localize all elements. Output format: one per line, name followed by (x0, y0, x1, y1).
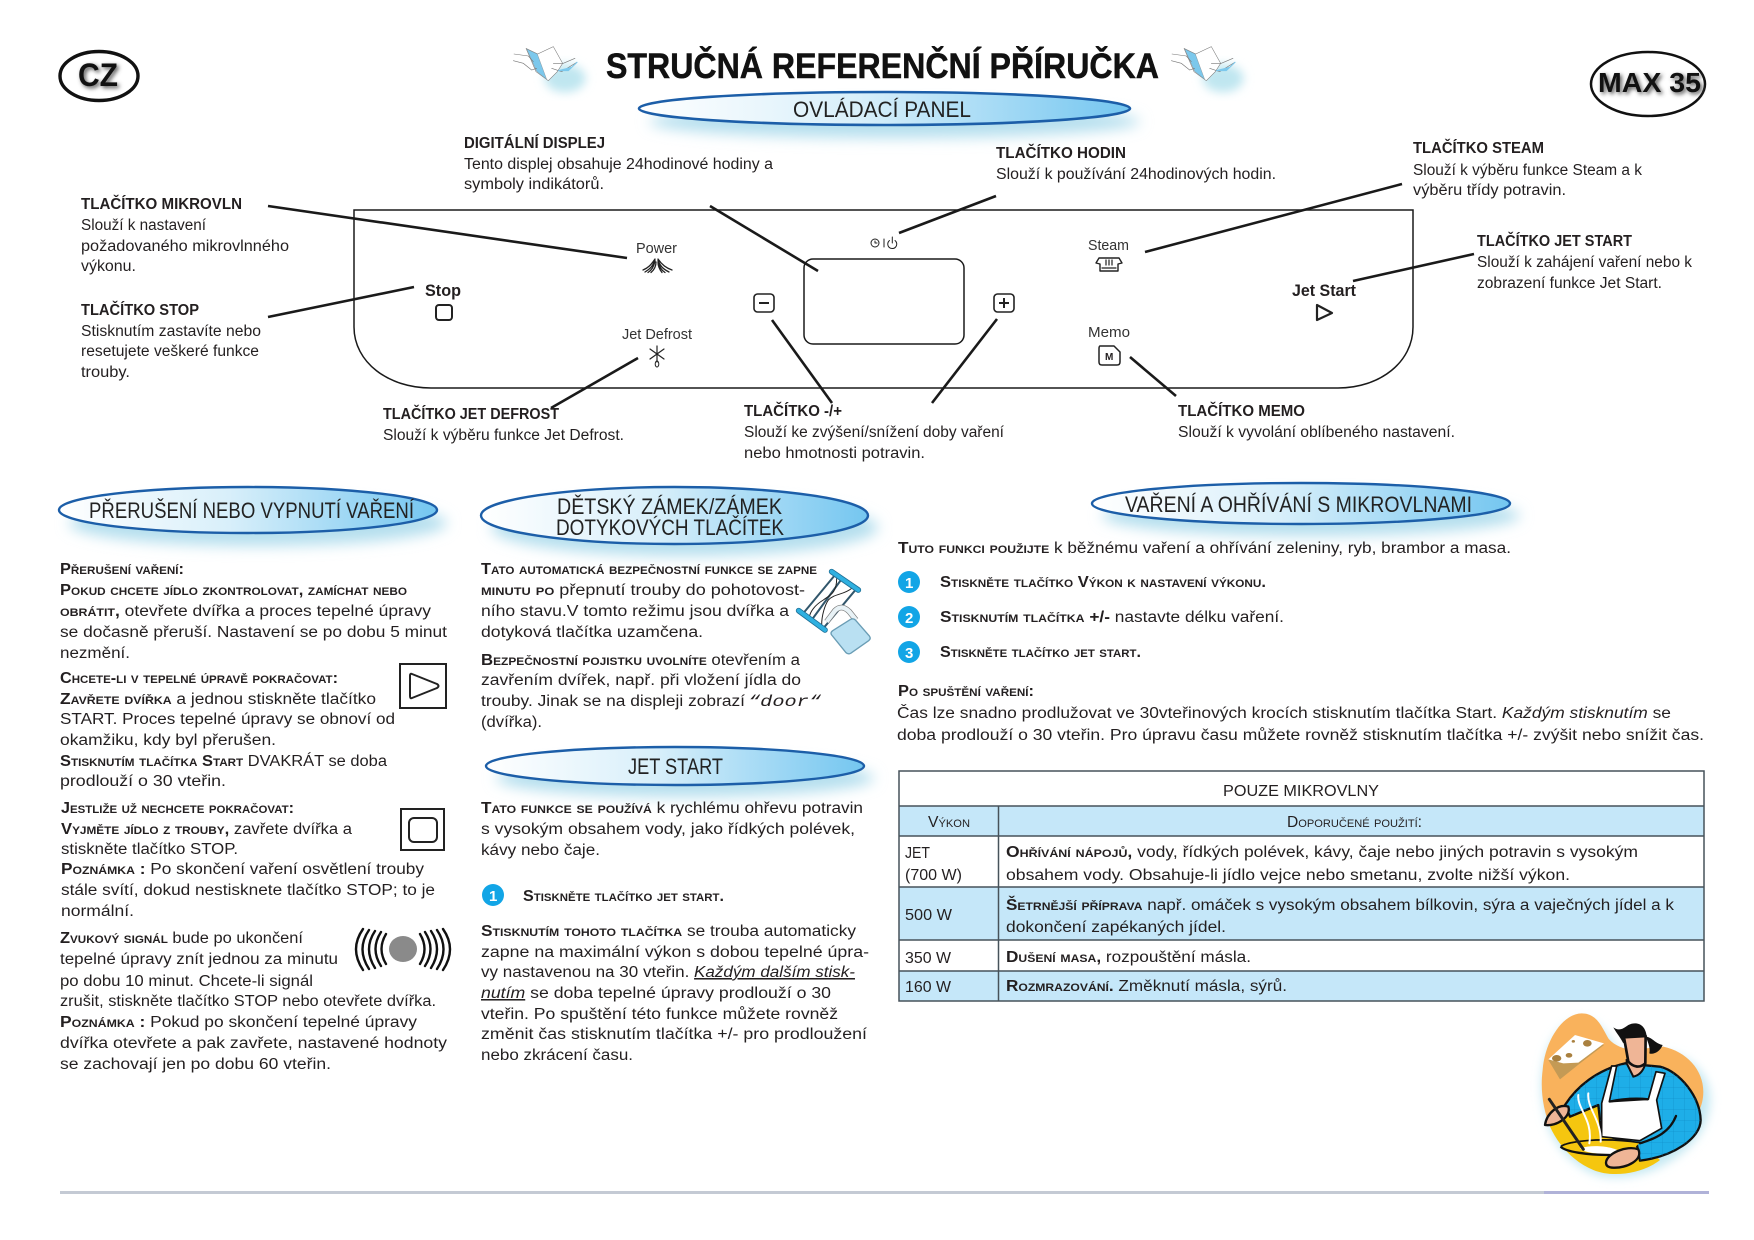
text: interrupt cooking: obrátit, otevřete dvířka a proces tepelné úpravy (60, 603, 431, 620)
label: memo button (1178, 402, 1455, 441)
heading oval: JET START (628, 754, 723, 779)
text: jet start details: vteřin. Po spuštění této funkce můžete rovněž (481, 1006, 838, 1023)
text: jet start details: změnit čas stisknutím tlačítka +/- pro prodloužení (481, 1026, 868, 1043)
row: 350 W: Dušení masa, rozpouštění másla. (1006, 949, 1251, 966)
label: steam button: Slouží k výběru funkce Steam a k (1413, 162, 1642, 179)
text: sound signal: tepelné úpravy znít jednou za minutu (60, 951, 338, 968)
label: jet start button: Slouží k zahájení vaření nebo k (1477, 254, 1692, 271)
plus button (994, 294, 1014, 312)
text: sound signal: Poznámka : Pokud po skončení tepelné úpravy (60, 1014, 417, 1031)
text: interrupt cooking: nezmění. (60, 645, 130, 662)
step 3 (898, 641, 1141, 663)
label: digital display: symboly indikátorů. (464, 176, 604, 193)
row: 160 W: Rozmrazování. Změknutí másla, sýrů. (1006, 978, 1287, 995)
minus button (754, 294, 774, 312)
text: automatic safety function: Tato automatická bezpečnostní funkce se zapne (481, 561, 817, 578)
badge: CZ (60, 52, 138, 100)
heading oval: VAŘENÍ A OHŘÍVÁNÍ S MIKROVLNAMI (1125, 492, 1472, 517)
icon: stop button (401, 809, 444, 850)
heading oval: DĚTSKÝ ZÁMEK/ZÁMEK (557, 494, 782, 519)
title: STRUČNÁ REFERENČNÍ PŘÍRUČKA (606, 46, 1159, 86)
row: jet: JET (905, 845, 930, 862)
digital display (804, 259, 964, 344)
label: clock button: TLAČÍTKO HODIN (996, 144, 1126, 162)
text: do not continue: stiskněte tlačítko STOP. (61, 841, 238, 858)
step 1: 1 (905, 575, 913, 592)
text: jet start details: zapne na maximální výkon s dobou tepelné úpra- (481, 944, 869, 961)
text: unlocking: zavřením dvířek, např. při vložení jídla do (481, 672, 801, 689)
step 2: 2 (905, 610, 913, 627)
text: to continue: Chcete-li v tepelné úpravě pokračovat: (60, 670, 338, 687)
step 1 (482, 884, 724, 906)
label: minus plus button (744, 402, 1005, 462)
text: jet start details: vy nastavenou na 30 vteřin. Každým dalším stisk- (481, 964, 855, 981)
text: unlocking: “door“ (748, 693, 822, 711)
panel: child lock (481, 487, 878, 731)
power control (636, 240, 677, 272)
step 3: 3 (905, 645, 913, 662)
text: unlocking: trouby. Jinak se na displeji zobrazí (481, 693, 746, 710)
label: minus plus button: TLAČÍTKO -/+ (744, 402, 842, 420)
text: unlocking: (dvířka). (481, 714, 542, 731)
text: jet start purpose: Tato funkce se používá k rychlému ohřevu potravin (481, 800, 863, 817)
text: interrupt cooking (60, 561, 448, 662)
text: intro: Tuto funkci použijte k běžnému vaření a ohřívání zeleniny, ryb, brambor a masa. (898, 540, 1511, 557)
icon: sound (356, 929, 450, 970)
jet start control: Jet Start (1292, 281, 1356, 300)
badge: MAX 35: MAX 35 (1598, 67, 1701, 98)
label: stop button (81, 301, 261, 381)
row: jet: obsahem vody. Obsahuje-li jídlo vejce nebo smetanu, zvolte nižší výkon. (1006, 867, 1570, 884)
text: to continue: Zavřete dvířka a jednou stiskněte tlačítko (60, 691, 376, 708)
text: do not continue: normální. (61, 903, 134, 920)
text: do not continue: Poznámka : Po skončení vaření osvětlení trouby (61, 861, 424, 878)
diagram: control panel (354, 210, 1413, 388)
callout lines (268, 184, 1474, 408)
label: jet start button (1477, 232, 1692, 292)
label: steam button: TLAČÍTKO STEAM (1413, 139, 1544, 157)
badge: CZ: CZ (78, 57, 118, 93)
text: unlocking: Bezpečnostní pojistku uvolníte otevřením a (481, 652, 800, 669)
text: automatic safety function: ního stavu.V tomto režimu jsou dvířka a (481, 603, 789, 620)
text: jet start details: nutím se doba tepelné úpravy prodlouží o 30 (481, 985, 831, 1002)
text: after start: Po spuštění vaření: (898, 683, 1034, 700)
step 2 (898, 606, 1284, 628)
text: sound signal: zrušit, stiskněte tlačítko STOP nebo otevřete dvířka. (60, 993, 436, 1010)
clock icons (871, 237, 897, 249)
label: clock button (996, 144, 1276, 183)
text: automatic safety function (481, 561, 817, 641)
power control: Power (636, 240, 677, 257)
label: jet start button: TLAČÍTKO JET START (1477, 232, 1632, 250)
label: jet defrost button: Slouží k výběru funkce Jet Defrost. (383, 427, 624, 444)
illustration: chef (1542, 1013, 1710, 1177)
text: after start (897, 683, 1704, 744)
jet start control (1292, 281, 1356, 320)
panel: interrupt or stop cooking (59, 487, 450, 1073)
text: to continue (60, 670, 395, 790)
step 1: 1 (489, 888, 497, 905)
badge: CZ: CZ (80, 59, 120, 95)
row: 500 W: 500 W (905, 907, 952, 924)
text: unlocking (481, 652, 822, 731)
text: jet start purpose: kávy nebo čaje. (481, 842, 600, 859)
icon: start button (400, 664, 446, 708)
label: microwave button (81, 195, 289, 275)
row: 160 W: 160 W (905, 979, 951, 996)
text: jet start details: Stisknutím tohoto tlačítka se trouba automaticky (481, 923, 856, 940)
text: sound signal: se zachovají jen po dobu 60 vteřin. (60, 1056, 331, 1073)
label: digital display (464, 135, 773, 193)
label: steam button: výběru třídy potravin. (1413, 182, 1566, 199)
icon: book right (1171, 47, 1244, 92)
text: to continue: START. Proces tepelné úpravy se obnoví od (60, 711, 395, 728)
text: interrupt cooking: Pokud chcete jídlo zkontrolovat, zamíchat nebo (60, 582, 407, 599)
row: 160 W (905, 978, 1287, 996)
text: automatic safety function: minutu po přepnutí trouby do pohotovost- (481, 582, 805, 599)
icon: book left (513, 47, 586, 92)
stop control (425, 281, 461, 320)
text: after start: Čas lze snadno prodlužovat ve 30vteřinových krocích stisknutím tlačítka Start. Každým stisknutím se (897, 705, 1671, 722)
memo control (1088, 324, 1130, 365)
stop control: Stop (425, 281, 461, 300)
badge: MAX 35 (1591, 52, 1705, 116)
text: jet start details (481, 923, 869, 1064)
heading oval (481, 487, 878, 556)
text: sound signal (60, 930, 447, 1073)
step 3: Stiskněte tlačítko jet start. (940, 644, 1141, 661)
text: jet start purpose (481, 800, 863, 859)
row: jet (905, 844, 1638, 884)
label: microwave button: TLAČÍTKO MIKROVLN (81, 195, 242, 213)
text: jet start details: nebo zkrácení času. (481, 1047, 633, 1064)
label: microwave button: požadovaného mikrovlnného (81, 238, 289, 255)
heading oval (1092, 483, 1520, 536)
steam control: Steam (1088, 237, 1129, 254)
label: jet defrost button: TLAČÍTKO JET DEFROST (383, 405, 559, 423)
label: stop button: trouby. (81, 364, 130, 381)
label: jet start button: zobrazení funkce Jet Start. (1477, 275, 1662, 292)
text: to continue: prodlouží o 30 vteřin. (60, 773, 226, 790)
text: interrupt cooking: Přerušení vaření: (60, 561, 184, 578)
heading: ovládací panel: OVLÁDACÍ PANEL (793, 97, 971, 122)
row: 350 W: 350 W (905, 950, 951, 967)
table header: Výkon (928, 814, 970, 831)
row: 500 W: Šetrnější příprava např. omáček s vysokým obsahem bílkovin, sýra a vaječných jídel a k (1006, 896, 1674, 914)
table header (928, 814, 1422, 831)
label: stop button: resetujete veškeré funkce (81, 343, 259, 360)
footer rule (60, 1191, 1709, 1194)
label: memo button: Slouží k vyvolání oblíbeného nastavení. (1178, 424, 1455, 441)
step 1: Stiskněte tlačítko Výkon k nastavení výkonu. (940, 574, 1266, 591)
table title: POUZE MIKROVLNY (1223, 783, 1379, 800)
table header: Doporučené použití: (1287, 814, 1422, 831)
row: 500 W: dokončení zapékaných jídel. (1006, 919, 1226, 936)
text: to continue: Stisknutím tlačítka Start DVAKRÁT se doba (60, 753, 387, 770)
steam control (1088, 237, 1129, 271)
text: sound signal: po dobu 10 minut. Chcete-li signál (60, 973, 313, 990)
row: 350 W (905, 949, 1251, 967)
heading: ovládací panel (639, 92, 1140, 138)
label: memo button: TLAČÍTKO MEMO (1178, 402, 1305, 420)
text: interrupt cooking: se dočasně přeruší. Nastavení se po dobu 5 minut (60, 624, 448, 641)
text: do not continue: stále svítí, dokud nestisknete tlačítko STOP; to je (61, 882, 435, 899)
label: steam button (1413, 139, 1642, 199)
panel: jet start (481, 747, 874, 1064)
text: jet start purpose: s vysokým obsahem vody, jako řídkých polévek, (481, 821, 855, 838)
text: sound signal: Zvukový signál bude po ukončení (60, 930, 304, 947)
label: jet defrost button (383, 405, 624, 444)
text: do not continue: Vyjměte jídlo z trouby, zavřete dvířka a (61, 821, 352, 838)
text: after start: doba prodlouží o 30 vteřin. Pro úpravu času můžete rovněž stisknutím tlačítka +/- zvýšit nebo snížit čas. (897, 727, 1704, 744)
heading oval (59, 487, 447, 546)
jet defrost control: Jet Defrost (622, 326, 693, 343)
row: 500 W (905, 896, 1674, 936)
jet defrost control (622, 326, 693, 367)
label: stop button: Stisknutím zastavíte nebo (81, 323, 261, 340)
heading oval: PŘERUŠENÍ NEBO VYPNUTÍ VAŘENÍ (89, 498, 415, 523)
text: sound signal: dvířka otevřete a pak zavřete, nastavené hodnoty (60, 1035, 447, 1052)
memo control: M (1105, 352, 1113, 363)
panel: microwave cooking (897, 483, 1704, 1001)
heading oval: DOTYKOVÝCH TLAČÍTEK (556, 515, 784, 540)
label: stop button: TLAČÍTKO STOP (81, 301, 199, 319)
badge: MAX 35: MAX 35 (1600, 69, 1703, 100)
row: jet: Ohřívání nápojů, vody, řídkých polévek, kávy, čaje nebo jiných potravin s vysokým (1006, 844, 1638, 861)
label: minus plus button: nebo hmotnosti potravin. (744, 445, 925, 462)
heading oval (486, 747, 874, 797)
row: jet: (700 W) (905, 867, 962, 884)
memo control: Memo (1088, 324, 1130, 341)
label: digital display: Tento displej obsahuje 24hodinové hodiny a (464, 156, 773, 173)
text: automatic safety function: dotyková tlačítka uzamčena. (481, 624, 703, 641)
text: to continue: okamžiku, kdy byl přerušen. (60, 732, 276, 749)
label: microwave button: výkonu. (81, 258, 136, 275)
label: microwave button: Slouží k nastavení (81, 217, 207, 234)
table: microwave only (899, 771, 1704, 1001)
text: do not continue (61, 800, 435, 920)
text: do not continue: Jestliže už nechcete pokračovat: (61, 800, 294, 817)
label: minus plus button: Slouží ke zvýšení/snížení doby vaření (744, 424, 1005, 441)
icon: hourglass and padlock (799, 572, 870, 654)
step 1 (898, 571, 1266, 593)
label: clock button: Slouží k používání 24hodinových hodin. (996, 166, 1276, 183)
step 2: Stisknutím tlačítka +/- nastavte délku vaření. (940, 609, 1284, 626)
step 1: Stiskněte tlačítko jet start. (523, 888, 724, 905)
label: digital display: DIGITÁLNÍ DISPLEJ (464, 135, 605, 152)
